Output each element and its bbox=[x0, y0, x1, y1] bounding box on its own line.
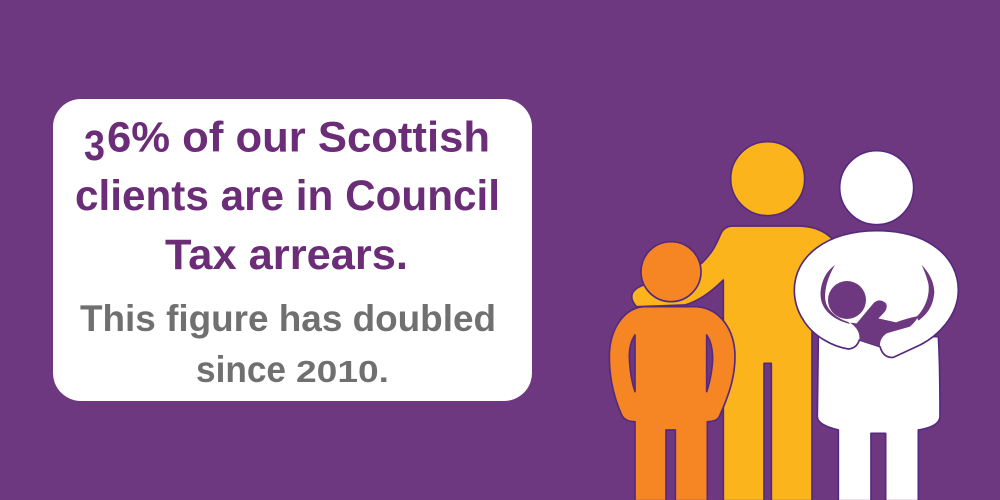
icon: family of three figures bbox=[609, 142, 958, 500]
heading: main statistic: 6% of our Scottish bbox=[107, 114, 490, 162]
icon: adult in yellow bbox=[632, 142, 832, 500]
icon: baby bbox=[828, 281, 918, 347]
text block: supporting statement: 2010. bbox=[296, 354, 389, 389]
text block: supporting statement: This figure has doubled bbox=[80, 298, 496, 339]
panel: white callout bbox=[53, 99, 532, 401]
heading: main statistic: clients are in Council bbox=[75, 172, 500, 220]
heading: main statistic: 3 bbox=[84, 122, 105, 170]
heading: main statistic bbox=[75, 114, 500, 279]
callout background bbox=[53, 99, 532, 401]
icon: child in orange bbox=[609, 242, 735, 500]
heading: main statistic: Tax arrears. bbox=[165, 231, 408, 279]
text block: supporting statement: since bbox=[196, 349, 286, 390]
icon: adult in white holding a baby bbox=[794, 151, 958, 500]
text block: supporting statement bbox=[80, 298, 496, 390]
